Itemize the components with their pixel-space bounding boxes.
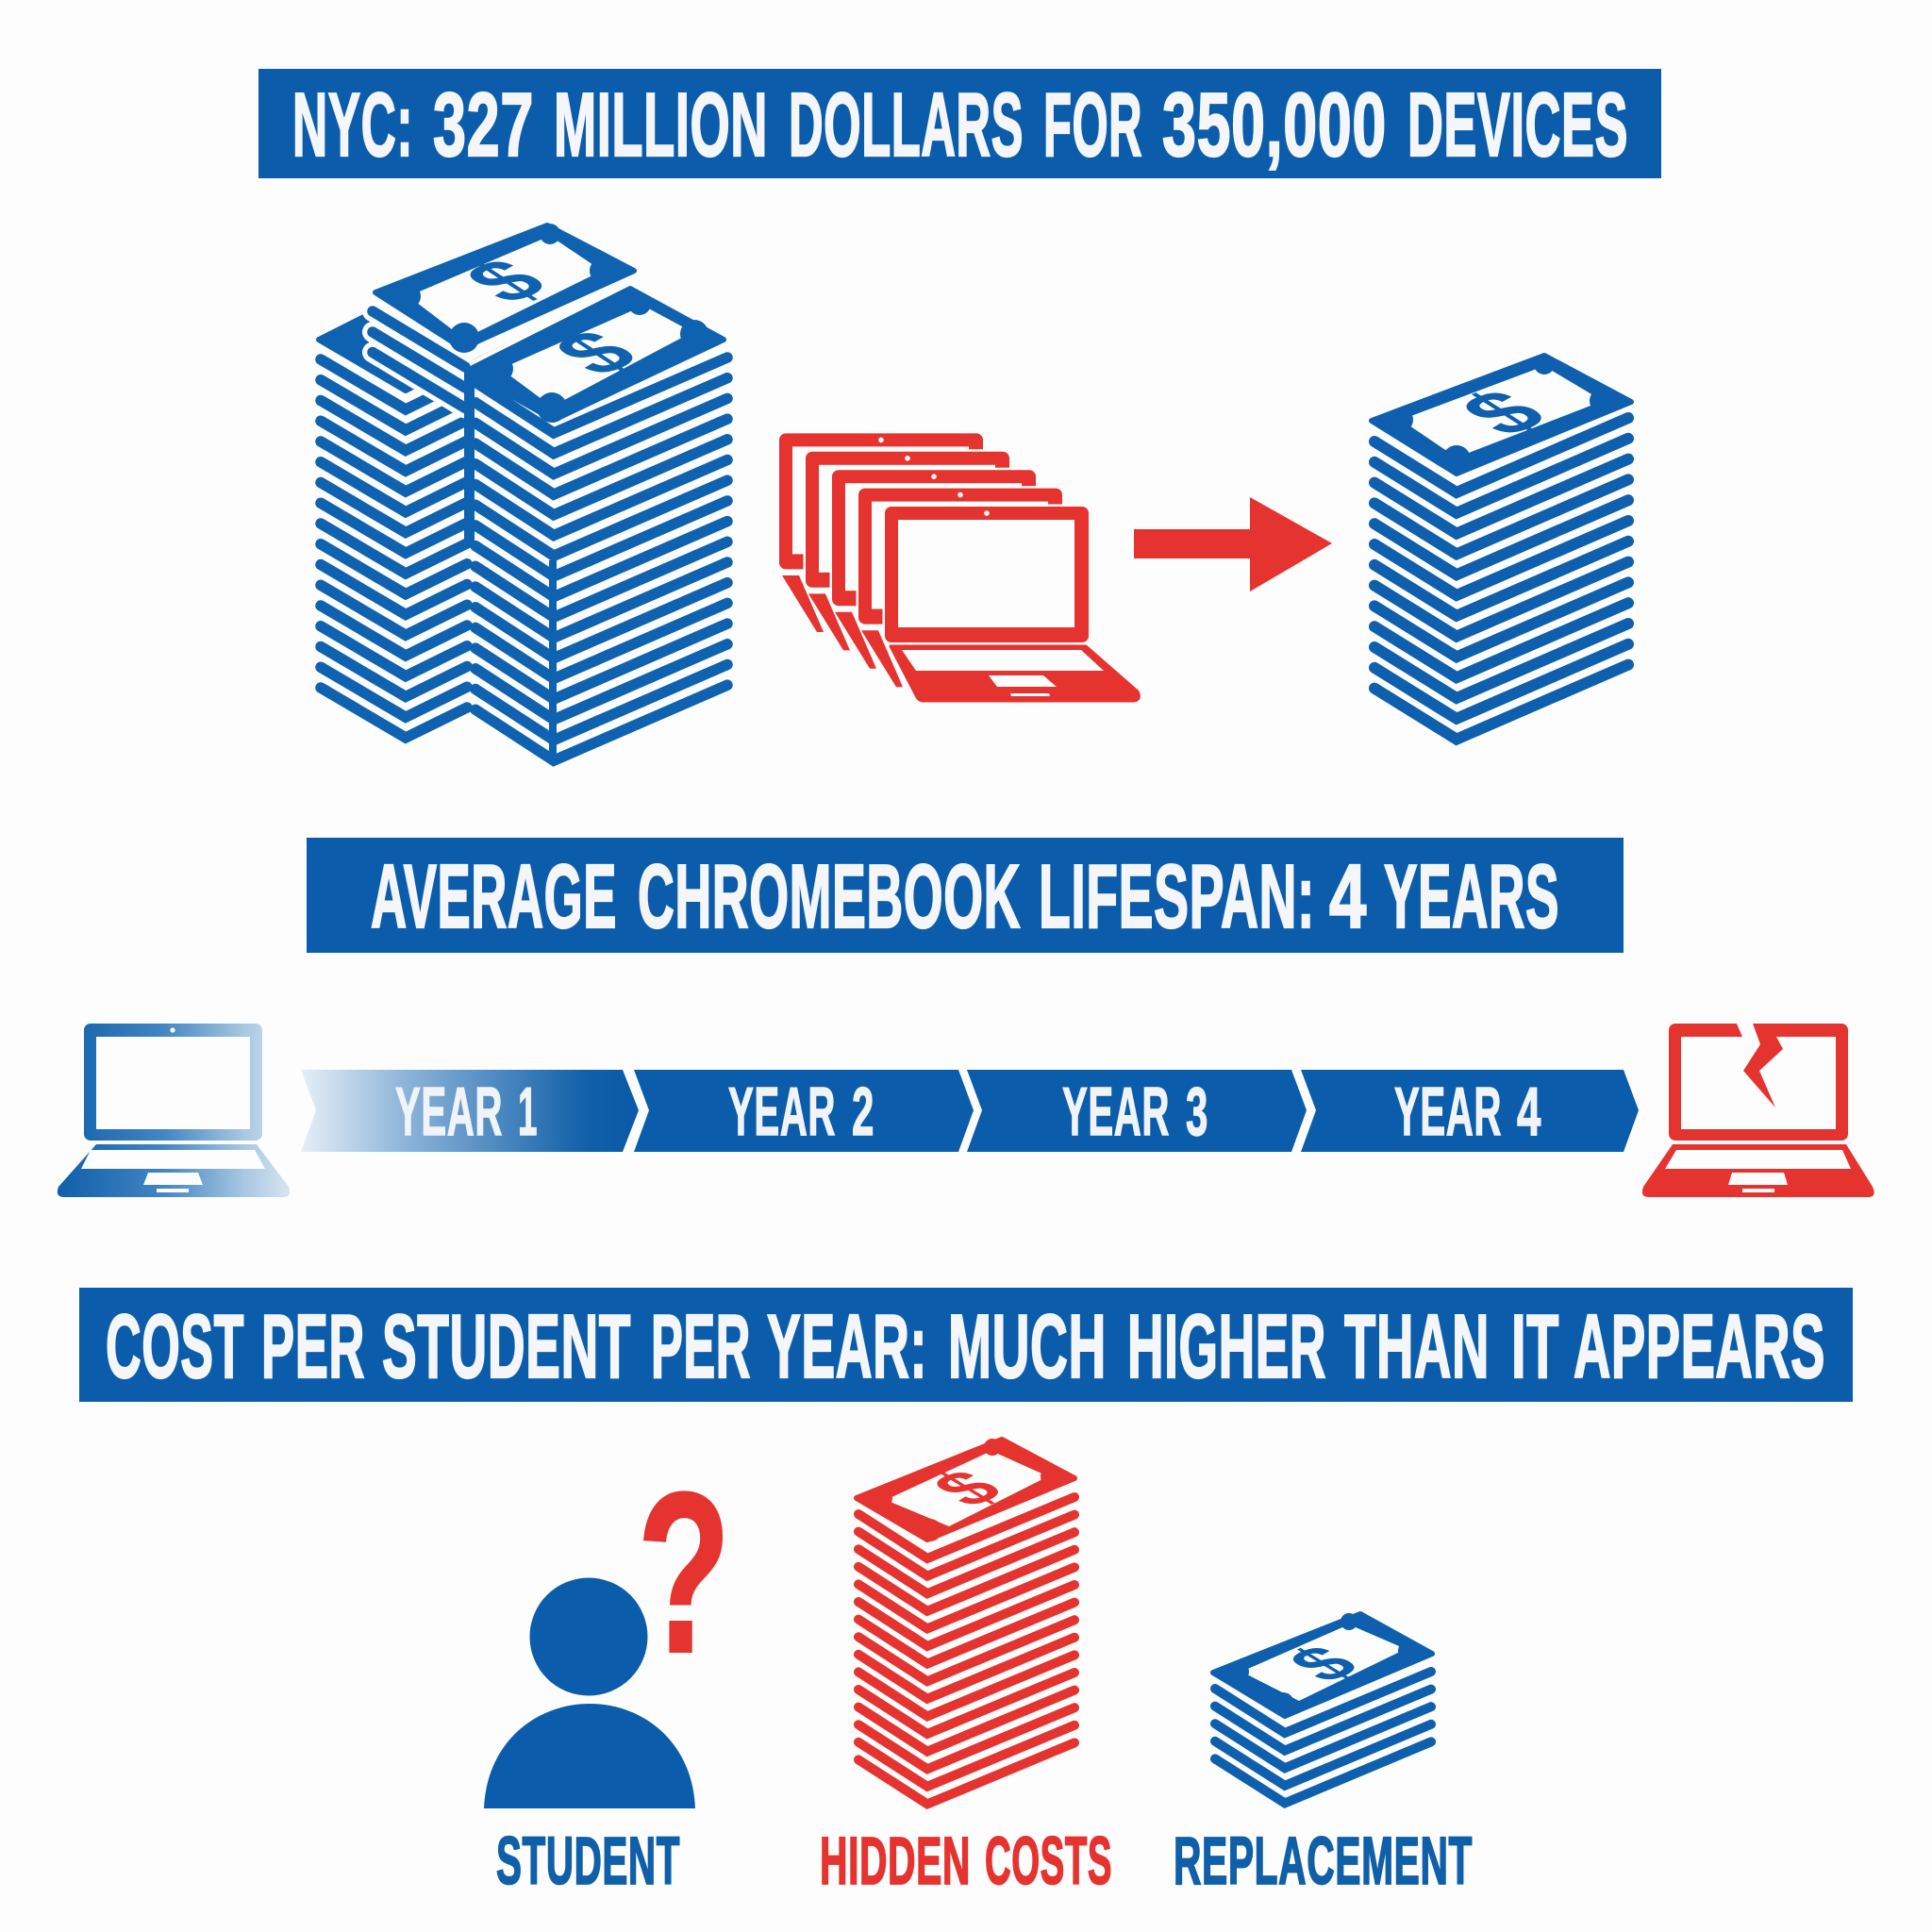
left tower of bills (319, 258, 569, 738)
front right tower of bills (467, 289, 727, 760)
heading banner: lifespan: CHROMEBOOK (638, 846, 1021, 947)
title banner: NYC devices: MILLION (554, 75, 768, 175)
chevron: year 1: YEAR (395, 1074, 503, 1150)
heading banner: lifespan: AVERAGE (371, 846, 617, 947)
title banner: NYC devices: 350,000 (1162, 75, 1387, 175)
label: hidden costs: HIDDEN (820, 1824, 971, 1899)
chevron: year 4: YEAR (1394, 1074, 1502, 1150)
heading banner: cost per student: MUCH (948, 1296, 1107, 1397)
chevron: year 2: YEAR (728, 1074, 836, 1150)
rear tower of bills: $ (445, 246, 568, 316)
title banner: NYC devices: DEVICES (1407, 75, 1628, 175)
heading banner: lifespan: LIFESPAN: (1039, 846, 1315, 947)
chevron: year 3: 3 (1186, 1074, 1208, 1150)
question mark: ? (637, 1444, 731, 1701)
heading banner: cost per student: STUDENT (382, 1296, 631, 1397)
heading banner: cost per student: PER (261, 1296, 365, 1397)
front laptop (885, 507, 1139, 701)
title banner: NYC devices: 327 (433, 75, 534, 175)
icon: medium money stack: $ (1439, 376, 1568, 448)
icon: hidden costs red money stack (857, 1439, 1074, 1804)
chevron: year 2: 2 (852, 1074, 874, 1150)
rear tower of bills (366, 215, 651, 541)
front right tower of bills: $ (533, 318, 658, 388)
chevron: year 4: 4 (1517, 1074, 1541, 1150)
heading banner: cost per student: PER (651, 1296, 751, 1397)
title banner: NYC devices (258, 69, 1661, 178)
chevron: year 1: 1 (518, 1074, 538, 1150)
heading banner: cost per student: COST (106, 1296, 244, 1397)
icon: stack of red laptops (779, 433, 1139, 701)
heading banner: cost per student: THAN (1344, 1296, 1490, 1397)
student body (484, 1704, 695, 1808)
chevron: year 3: YEAR (1062, 1074, 1170, 1150)
icon: medium money stack (1372, 354, 1631, 740)
label: replacement: REPLACEMENT (1174, 1824, 1473, 1899)
timeline: four year chevrons (301, 1070, 1639, 1152)
heading banner: lifespan (307, 838, 1624, 953)
title banner: NYC devices: DOLLARS (789, 75, 1024, 175)
chevron: year 2 (634, 1070, 974, 1152)
arrow: laptops to money (1134, 497, 1332, 591)
icon: replacement money stack: $ (1271, 1636, 1376, 1692)
icon: replacement money stack (1213, 1613, 1432, 1803)
icon: large money stack, 327 million dollars (319, 215, 727, 760)
heading banner: cost per student: HIGHER (1127, 1296, 1326, 1397)
label: hidden costs: COSTS (985, 1824, 1112, 1899)
heading banner: cost per student (79, 1288, 1853, 1402)
heading banner: cost per student: YEAR: (767, 1296, 927, 1397)
icon: new blue laptop (58, 1024, 290, 1197)
heading banner: cost per student: IT (1511, 1296, 1559, 1397)
title banner: NYC devices: NYC: (292, 75, 413, 175)
chevron: year 3 (967, 1070, 1307, 1152)
title banner: NYC devices: FOR (1043, 75, 1142, 175)
chevron: year 1 (301, 1070, 639, 1152)
student head (530, 1577, 647, 1696)
heading banner: lifespan: 4 (1329, 846, 1367, 947)
chevron: year 4 (1301, 1070, 1639, 1152)
heading banner: lifespan: YEARS (1384, 846, 1559, 947)
icon: student with question mark (484, 1444, 731, 1808)
icon: broken red laptop (1642, 1022, 1874, 1197)
label: student: STUDENT (496, 1824, 680, 1899)
icon: hidden costs red money stack: $ (915, 1460, 1021, 1517)
